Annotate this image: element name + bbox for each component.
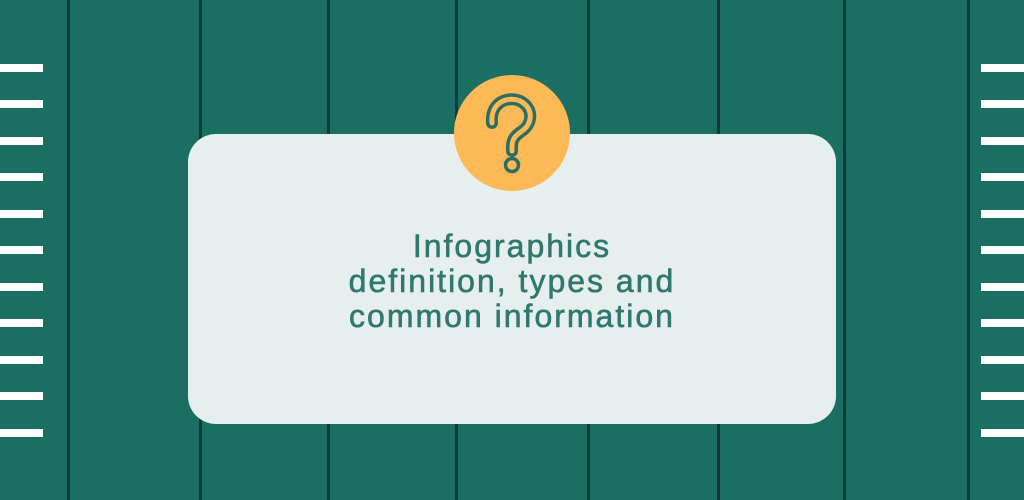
title: common information <box>349 298 675 334</box>
icon: question mark <box>454 75 570 191</box>
title: Infographics <box>413 228 611 264</box>
right tick marks <box>981 64 1024 437</box>
panel: title card <box>188 134 836 424</box>
left tick marks <box>0 64 43 437</box>
title <box>349 228 675 334</box>
title: definition, types and <box>349 263 675 299</box>
